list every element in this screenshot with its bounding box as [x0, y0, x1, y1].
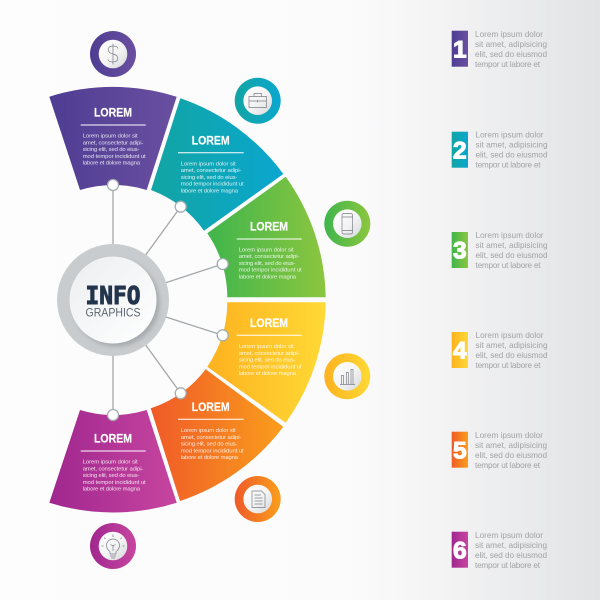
panel: magenta sector: LOREM — [94, 432, 132, 446]
panel: magenta sector: mod tempor incididunt ut — [83, 480, 146, 486]
list item 1: tempor ut labore et — [475, 60, 541, 69]
panel: green sector: Lorem ipsum dolor sit — [239, 247, 294, 253]
panel: yellow sector: mod tempor incididunt ut — [239, 364, 302, 370]
icon: document badge — [235, 476, 281, 522]
panel: yellow sector: amet, consectetur adipi- — [239, 351, 299, 357]
list item 6: 6 — [453, 537, 467, 564]
list item 6: tempor ut labore et — [475, 561, 541, 570]
list item 6: Lorem ipsum dolor — [475, 531, 543, 540]
panel: magenta sector: sicing elit, sed do eius- — [83, 473, 139, 479]
list item 1: 1 — [453, 36, 467, 63]
panel: teal sector: labore et dolore magna — [181, 188, 239, 194]
panel: green sector — [207, 177, 326, 297]
icon: briefcase badge — [235, 78, 281, 124]
list item 1: elit, sed do eiusmod — [475, 50, 547, 59]
list item 4: 4 — [453, 338, 467, 365]
list item 6: elit, sed do eiusmod — [475, 551, 547, 560]
list item 2: Lorem ipsum dolor — [476, 130, 544, 140]
list item 2: tempor ut labore et — [476, 160, 541, 170]
list item 3: Lorem ipsum dolor — [476, 231, 544, 240]
center hub: info graphics: INFO — [86, 281, 140, 310]
panel: green sector: amet, consectetur adipi- — [239, 254, 299, 260]
panel: green sector: mod tempor incididunt ut — [239, 268, 302, 274]
list item 4 — [452, 331, 548, 370]
panel: teal sector: Lorem ipsum dolor sit — [181, 161, 236, 167]
panel: orange sector: amet, consectetur adipi- — [181, 435, 241, 441]
list item 5: elit, sed do eiusmod — [475, 451, 547, 460]
center hub: info graphics: GRAPHICS — [86, 308, 141, 320]
list item 5: 5 — [453, 437, 467, 464]
list item 5: Lorem ipsum dolor — [475, 431, 543, 440]
panel: green sector: labore et dolore magna — [239, 274, 297, 280]
list item 3 — [452, 231, 548, 270]
panel: teal sector: sicing elit, sed do eius- — [181, 175, 237, 181]
panel: magenta sector — [49, 410, 177, 512]
panel: yellow sector — [207, 302, 326, 423]
list item 6 — [452, 531, 547, 570]
list item 1: sit amet, adipisicing — [475, 40, 547, 49]
panel: orange sector: mod tempor incididunt ut — [181, 448, 244, 454]
panel: yellow sector: sicing elit, sed do eius- — [239, 358, 295, 364]
icon: phone badge — [324, 201, 370, 247]
panel: purple sector: LOREM — [94, 106, 132, 120]
panel: magenta sector: labore et dolore magna — [83, 487, 141, 493]
list item 3: elit, sed do eiusmod — [476, 251, 548, 260]
panel: yellow sector: Lorem ipsum dolor sit — [239, 344, 294, 350]
panel: purple sector — [49, 87, 177, 190]
panel: magenta sector: amet, consectetur adipi- — [83, 466, 143, 472]
panel: purple sector: labore et dolore magna — [83, 161, 141, 167]
list item 2: 2 — [453, 137, 467, 164]
list item 1 — [452, 30, 547, 69]
panel: purple sector: Lorem ipsum dolor sit — [83, 134, 138, 140]
panel: teal sector: LOREM — [192, 133, 230, 147]
list item 3: 3 — [453, 238, 467, 265]
list item 5: sit amet, adipisicing — [475, 441, 547, 450]
panel: orange sector — [151, 369, 283, 501]
panel: yellow sector: labore et dolore magna — [239, 371, 297, 377]
panel: green sector: LOREM — [250, 219, 288, 233]
panel: teal sector: amet, consectetur adipi- — [181, 168, 241, 174]
list item 2: sit amet, adipisicing — [476, 140, 548, 150]
panel: purple sector: sicing elit, sed do eius- — [83, 147, 139, 153]
list item 5: tempor ut labore et — [475, 461, 541, 470]
list item 3: sit amet, adipisicing — [476, 241, 548, 250]
panel: orange sector: labore et dolore magna — [181, 455, 239, 461]
panel: magenta sector: Lorem ipsum dolor sit — [83, 460, 138, 466]
connector lines — [113, 185, 223, 415]
panel: teal sector — [151, 98, 283, 231]
panel: purple sector: mod tempor incididunt ut — [83, 154, 146, 160]
panel: green sector: sicing elit, sed do eius- — [239, 261, 295, 267]
icon: light bulb badge — [90, 523, 136, 569]
list item 1: Lorem ipsum dolor — [475, 30, 543, 39]
list item 4: tempor ut labore et — [476, 361, 541, 370]
list item 5 — [452, 431, 547, 470]
panel: orange sector: LOREM — [192, 400, 230, 414]
list item 2: elit, sed do eiusmod — [476, 150, 548, 160]
icon: bar chart badge — [324, 353, 370, 399]
panel: yellow sector: LOREM — [250, 316, 288, 330]
list item 4: Lorem ipsum dolor — [476, 331, 544, 340]
list item 3: tempor ut labore et — [476, 261, 541, 270]
list item 6: sit amet, adipisicing — [475, 541, 547, 550]
list item 4: elit, sed do eiusmod — [476, 351, 548, 360]
panel: orange sector: Lorem ipsum dolor sit — [181, 428, 236, 434]
panel: orange sector: sicing elit, sed do eius- — [181, 442, 237, 448]
center hub: info graphics — [57, 244, 169, 356]
list item 2 — [452, 130, 548, 170]
panel: purple sector: amet, consectetur adipi- — [83, 140, 143, 146]
panel: teal sector: mod tempor incididunt ut — [181, 182, 244, 188]
icon: dollar badge — [90, 31, 136, 77]
connector nodes — [108, 180, 228, 420]
list item 4: sit amet, adipisicing — [476, 341, 548, 350]
